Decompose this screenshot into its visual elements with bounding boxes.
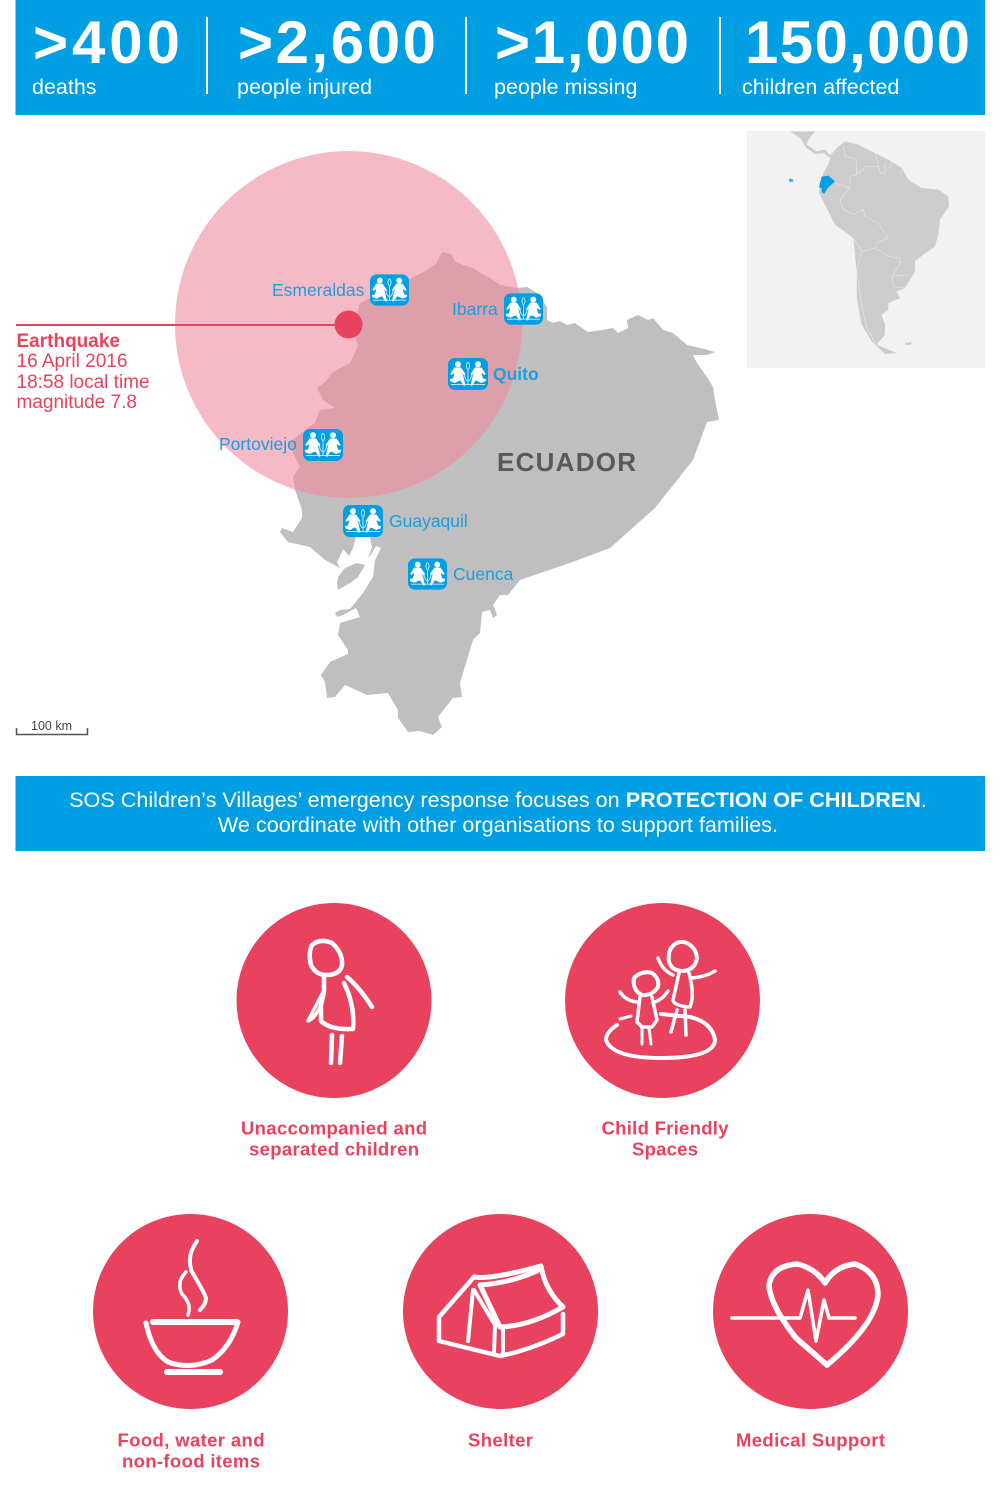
stat: people injured: people injured bbox=[237, 75, 372, 99]
service: child friendly spaces: Child Friendly bbox=[602, 1118, 729, 1138]
stat: deaths: >400 bbox=[33, 9, 180, 76]
earthquake epicentre line and dot bbox=[16, 310, 362, 338]
Ecuador country shape bbox=[280, 252, 719, 735]
location: Cuenca bbox=[408, 558, 514, 590]
icon: child bbox=[308, 941, 372, 1063]
service: unaccompanied and separated children bbox=[236, 903, 432, 1160]
response statement band: We coordinate with other organisations to support families. bbox=[218, 812, 778, 837]
icon: heart with heartbeat bbox=[732, 1264, 878, 1365]
earthquake details: Earthquake bbox=[16, 331, 120, 352]
icon: children on play mat bbox=[606, 942, 715, 1058]
service: shelter bbox=[403, 1214, 598, 1450]
location: Cuenca: Cuenca bbox=[453, 564, 514, 584]
service: child friendly spaces: Spaces bbox=[632, 1138, 698, 1160]
inset map: South America locator bbox=[747, 131, 985, 368]
stat: people missing: people missing bbox=[494, 75, 637, 99]
icon: tent bbox=[439, 1266, 563, 1356]
stat: deaths: deaths bbox=[32, 75, 97, 99]
icon: steaming bowl bbox=[146, 1241, 238, 1372]
earthquake details bbox=[16, 331, 150, 413]
stat: people missing: >1,000 bbox=[495, 9, 689, 76]
country label: ECUADOR bbox=[497, 447, 636, 477]
scale bar bbox=[16, 719, 88, 734]
stats banner bbox=[16, 0, 985, 115]
Ecuador highlighted bbox=[819, 176, 835, 194]
earthquake details: magnitude 7.8 bbox=[16, 392, 137, 413]
service: child friendly spaces bbox=[565, 903, 760, 1160]
stat: people injured: >2,600 bbox=[238, 9, 436, 76]
impact radius circle bbox=[175, 151, 522, 498]
service: unaccompanied and separated children: separated children bbox=[249, 1138, 419, 1160]
earthquake details: 16 April 2016 bbox=[16, 351, 127, 372]
location: Portoviejo: Portoviejo bbox=[219, 434, 297, 454]
location: Portoviejo bbox=[219, 429, 343, 461]
location: Esmeraldas bbox=[272, 274, 409, 306]
location: Esmeraldas: Esmeraldas bbox=[272, 280, 365, 300]
location: Quito bbox=[448, 358, 539, 390]
main map bbox=[16, 151, 719, 735]
service: shelter: Shelter bbox=[468, 1430, 533, 1450]
stat: children affected: children affected bbox=[742, 75, 899, 99]
location: Guayaquil bbox=[343, 505, 468, 537]
response statement band: SOS Children’s Villages’ emergency response focuses on PROTECTION OF CHILDREN. bbox=[69, 787, 927, 812]
response statement band bbox=[16, 776, 985, 851]
scale bar: 100 km bbox=[31, 719, 72, 733]
location: Quito: Quito bbox=[493, 364, 539, 384]
stat: children affected: 150,000 bbox=[745, 9, 970, 76]
service: medical support bbox=[713, 1214, 908, 1450]
Galapagos islands bbox=[789, 179, 794, 182]
service: unaccompanied and separated children: Unaccompanied and bbox=[241, 1118, 427, 1138]
service: food, water and non-food items: non-food items bbox=[122, 1450, 260, 1472]
service: food, water and non-food items: Food, water and bbox=[118, 1430, 264, 1450]
service: food, water and non-food items bbox=[93, 1214, 288, 1472]
location: Ibarra: Ibarra bbox=[452, 299, 498, 319]
service: medical support: Medical Support bbox=[736, 1430, 885, 1450]
earthquake details: 18:58 local time bbox=[16, 372, 150, 393]
location: Ibarra bbox=[452, 293, 543, 325]
location: Guayaquil: Guayaquil bbox=[389, 511, 468, 531]
